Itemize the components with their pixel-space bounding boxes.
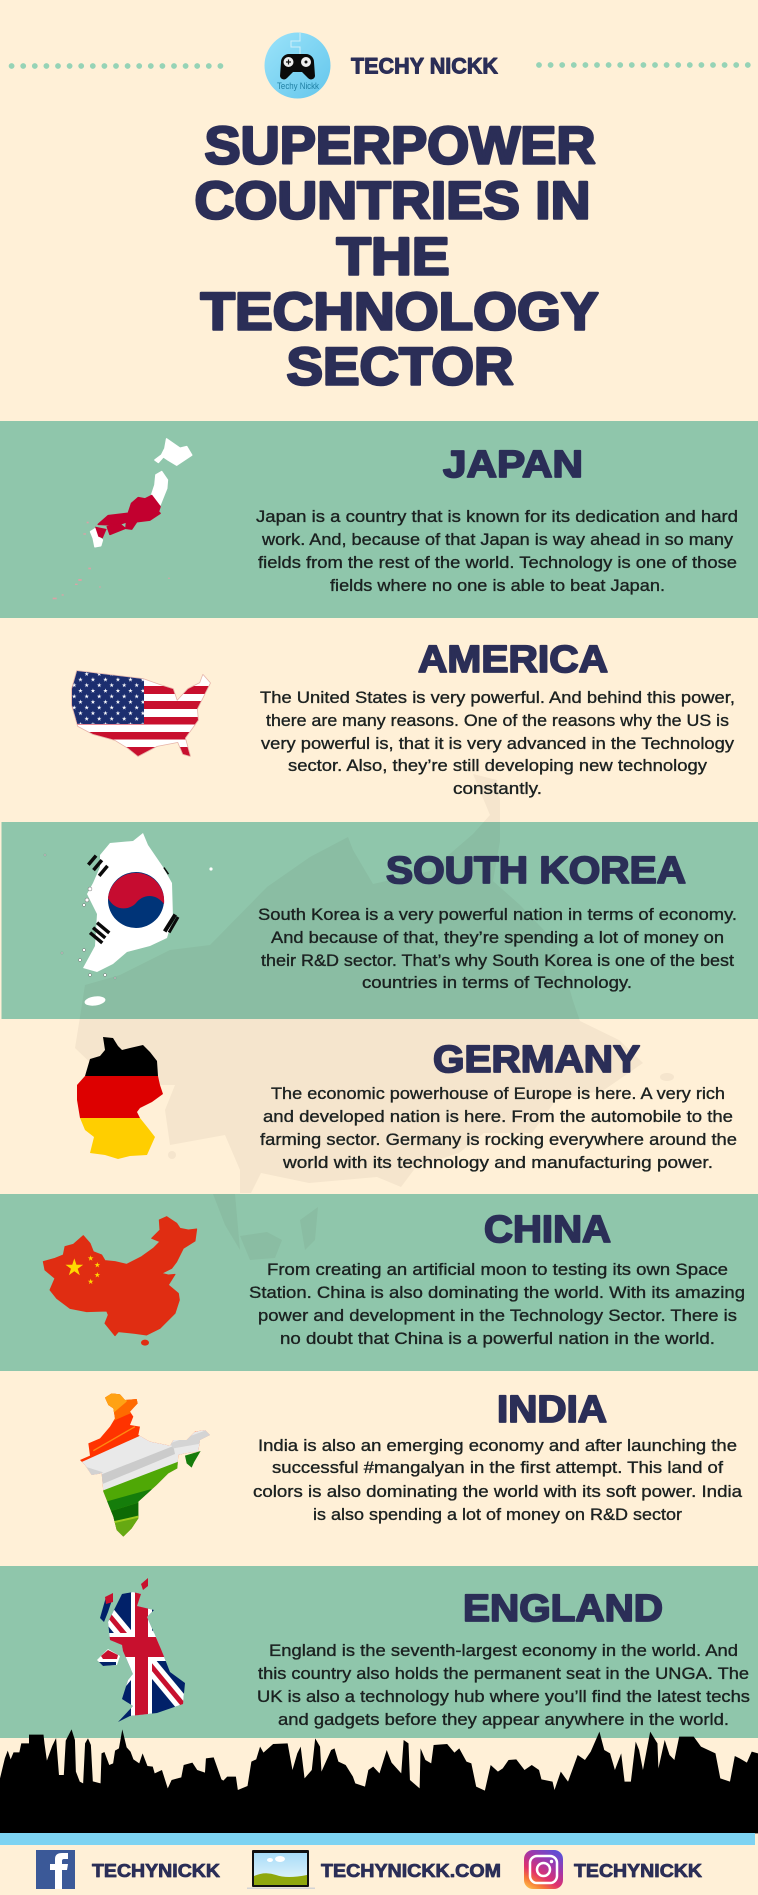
- title: [194, 116, 598, 396]
- label: TECHYNICKK: [574, 1861, 702, 1881]
- body text: this country also holds the permanent seat in the UNGA. The: [258, 1664, 749, 1683]
- label: TECHYNICKK: [92, 1861, 220, 1881]
- footer: Instagram: [524, 1850, 702, 1889]
- body text: South Korea is a very powerful nation in terms of economy.: [258, 905, 737, 924]
- body text: and developed nation is here. From the automobile to the: [263, 1107, 733, 1126]
- panel: Japan: [0, 421, 758, 618]
- panel: Germany: [77, 1037, 737, 1172]
- body text: very powerful is, that it is very advanced in the Technology: [261, 734, 735, 753]
- decorative dots right: [536, 62, 751, 68]
- body text: power and development in the Technology Sector. There is: [258, 1306, 737, 1325]
- icon: Instagram: [524, 1850, 563, 1889]
- title: TECHNOLOGY: [200, 282, 598, 342]
- icon: UK flag map: [97, 1578, 185, 1722]
- icon: Germany flag map: [77, 1037, 163, 1159]
- panel: India: [80, 1393, 742, 1537]
- body text: And because of that, they’re spending a lot of money on: [271, 928, 724, 947]
- title: COUNTRIES IN: [194, 172, 590, 230]
- body text: and gadgets before they appear anywhere in the world.: [278, 1710, 729, 1729]
- title: SUPERPOWER: [204, 116, 596, 176]
- title: SECTOR: [286, 338, 514, 396]
- icon: China flag map: [43, 1217, 197, 1346]
- body text: The economic powerhouse of Europe is here. A very rich: [271, 1084, 725, 1103]
- body text: constantly.: [453, 779, 542, 798]
- title: THE: [336, 228, 450, 286]
- body text: [256, 507, 738, 595]
- heading: GERMANY: [433, 1039, 640, 1081]
- icon: USA flag map: [70, 668, 215, 760]
- heading: SOUTH KOREA: [386, 850, 686, 892]
- body text: From creating an artificial moon to testing its own Space: [267, 1260, 728, 1279]
- heading: CHINA: [484, 1209, 611, 1251]
- heading: JAPAN: [443, 444, 583, 486]
- body text: The United States is very powerful. And behind this power,: [260, 688, 735, 707]
- heading: ENGLAND: [463, 1588, 663, 1630]
- body text: [260, 1084, 737, 1172]
- icon: laptop: [247, 1850, 315, 1889]
- body text: fields from the rest of the world. Technology is one of those: [258, 553, 737, 572]
- icon: India flag map: [80, 1393, 210, 1537]
- icon: South Korea flag map: [44, 833, 213, 1007]
- body text: [257, 1641, 750, 1729]
- decorative dots left: [9, 63, 223, 69]
- city skyline: [0, 1729, 758, 1833]
- body text: colors is also dominating the world with its soft power. India: [253, 1482, 743, 1501]
- heading: AMERICA: [418, 639, 608, 681]
- body text: Japan is a country that is known for its dedication and hard: [256, 507, 738, 526]
- body text: India is also an emerging economy and after launching the: [258, 1436, 737, 1455]
- heading: INDIA: [497, 1389, 607, 1431]
- body text: world with its technology and manufacturing power.: [282, 1153, 713, 1172]
- body text: [249, 1260, 745, 1348]
- panel: China: [0, 774, 758, 1371]
- icon: Japan flag map: [53, 439, 192, 599]
- body text: successful #mangalyan in the first attempt. This land of: [272, 1458, 723, 1477]
- body text: [260, 688, 735, 798]
- body text: [253, 1436, 743, 1524]
- icon: Facebook: [36, 1850, 75, 1889]
- footer: website: [247, 1850, 501, 1889]
- body text: work. And, because of that Japan is way ahead in so many: [261, 530, 734, 549]
- body text: their R&D sector. That’s why South Korea is one of the best: [261, 951, 734, 970]
- panel: America: [70, 639, 735, 798]
- body text: England is the seventh-largest economy in the world. And: [269, 1641, 738, 1660]
- body text: [258, 905, 737, 992]
- logo: game controller badge: Techy Nickk: [277, 81, 319, 91]
- body text: no doubt that China is a powerful nation in the world.: [280, 1329, 715, 1348]
- body text: sector. Also, they’re still developing new technology: [288, 756, 708, 775]
- logo: game controller badge: [264, 32, 330, 98]
- footer: Facebook: [36, 1850, 220, 1889]
- panel: South Korea: [2, 774, 758, 1260]
- body text: there are many reasons. One of the reasons why the US is: [266, 711, 729, 730]
- body text: countries in terms of Technology.: [362, 973, 632, 992]
- body text: fields where no one is able to beat Japan.: [330, 576, 665, 595]
- body text: farming sector. Germany is rocking everywhere around the: [260, 1130, 737, 1149]
- body text: Station. China is also dominating the world. With its amazing: [249, 1283, 745, 1302]
- panel: England: [0, 1566, 758, 1738]
- brand name: TECHY NICKK: [351, 54, 498, 78]
- body text: UK is also a technology hub where you’ll find the latest techs: [257, 1687, 750, 1706]
- blue footer strip: [0, 1833, 755, 1845]
- world map watermark: [75, 774, 674, 1260]
- label: TECHYNICKK.COM: [321, 1861, 501, 1881]
- body text: is also spending a lot of money on R&D sector: [313, 1505, 682, 1524]
